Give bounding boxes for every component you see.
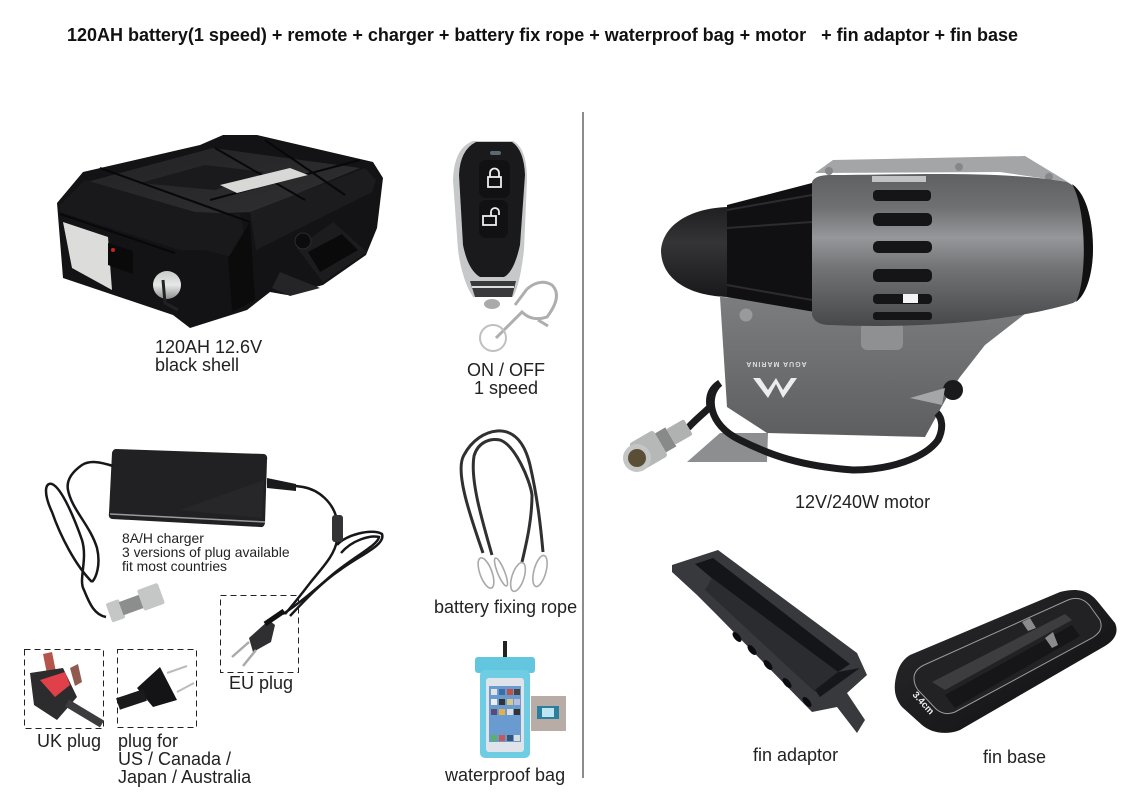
- motor logo: [753, 378, 797, 398]
- motor fins: [727, 183, 815, 312]
- motor top plate: [815, 156, 1068, 182]
- icon: motor: [623, 156, 1093, 472]
- fin base dimension text: 3.4cm: [910, 690, 936, 717]
- icon: charger: [46, 449, 382, 623]
- motor label: 12V/240W motor: [795, 492, 930, 512]
- divider line: [582, 112, 584, 778]
- charger label: 3 versions of plug available: [122, 544, 290, 560]
- icon: waterproof bag: [475, 641, 566, 758]
- icon: UK plug: [24, 650, 104, 728]
- fin base label: fin base: [983, 747, 1046, 767]
- icon: remote control: [453, 141, 556, 351]
- US plug label: US / Canada /: [118, 749, 231, 769]
- motor cylinder: [812, 174, 1093, 326]
- motor connector: [629, 414, 696, 470]
- motor cable: [688, 383, 942, 470]
- motor bracket: [687, 433, 768, 462]
- motor pylon: [720, 297, 1030, 437]
- icon: fixing rope: [461, 431, 550, 593]
- EU plug label: EU plug: [229, 673, 293, 693]
- icon: EU plug: [220, 596, 298, 672]
- rope label: battery fixing rope: [434, 597, 577, 617]
- remote label: 1 speed: [474, 378, 538, 398]
- charger label: fit most countries: [122, 558, 227, 574]
- icon: US plug: [118, 650, 196, 728]
- remote label: ON / OFF: [467, 360, 545, 380]
- icon: battery case: [57, 135, 383, 328]
- battery label: 120AH 12.6V: [155, 337, 262, 357]
- fin adaptor label: fin adaptor: [753, 745, 838, 765]
- charger label: 8A/H charger: [122, 530, 204, 546]
- icon: fin base: [895, 590, 1117, 733]
- bag label: waterproof bag: [444, 765, 565, 785]
- UK plug label: UK plug: [37, 731, 101, 751]
- motor brand text: AGUA MARINA: [745, 360, 807, 367]
- icon: fin adaptor: [672, 550, 867, 733]
- title: 120AH battery(1 speed) + remote + charger + battery fix rope + waterproof bag + motor + fin adaptor + fin base: [67, 25, 1018, 45]
- US plug label: Japan / Australia: [118, 767, 252, 787]
- battery label: black shell: [155, 355, 239, 375]
- US plug label: plug for: [118, 731, 178, 751]
- motor nose cone: [661, 207, 728, 297]
